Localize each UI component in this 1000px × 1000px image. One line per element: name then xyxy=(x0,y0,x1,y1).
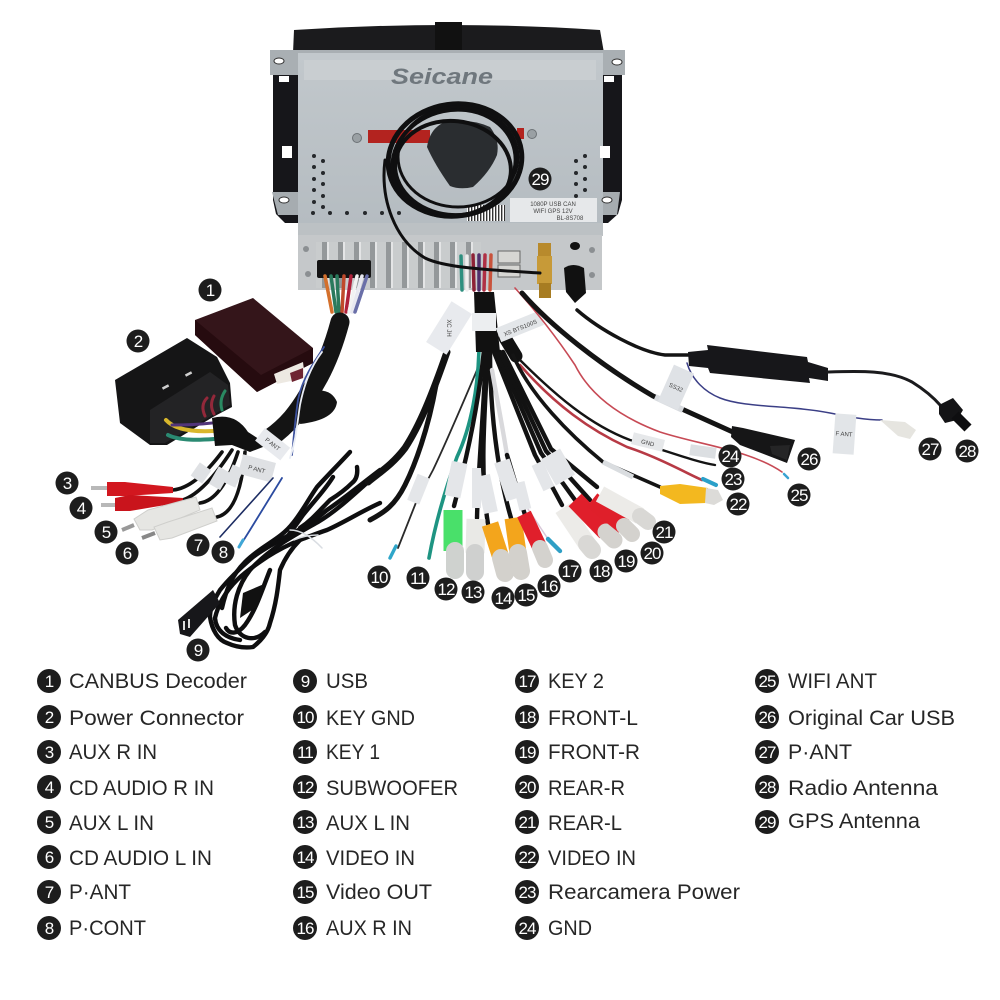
item 22: VIDEO IN xyxy=(548,846,636,870)
badge 8 xyxy=(212,540,234,564)
tag 24 xyxy=(689,444,717,459)
wire 10 xyxy=(398,370,477,548)
badge 10 xyxy=(368,566,390,588)
junction sleeve xyxy=(212,417,268,452)
radio antenna cable xyxy=(828,371,941,406)
cable 17 xyxy=(494,352,562,505)
item 27 xyxy=(755,740,852,764)
mounting ears xyxy=(270,50,625,75)
cable 16 xyxy=(492,370,508,462)
badge 11: 11 xyxy=(410,569,426,588)
wire 22 cable xyxy=(513,355,660,487)
rear screws xyxy=(303,246,595,278)
metal cover plate xyxy=(298,53,603,223)
badge 16: 16 xyxy=(541,577,558,596)
wire 24 xyxy=(520,360,715,465)
badge 28 xyxy=(956,440,978,462)
item 20 xyxy=(515,775,625,800)
left rear connector xyxy=(317,260,371,278)
badge 26: 26 xyxy=(801,450,818,469)
item 1: CANBUS Decoder xyxy=(69,669,247,693)
badge 9 xyxy=(186,638,210,662)
item 11: 11 xyxy=(297,743,313,762)
yellow RCA xyxy=(660,484,723,505)
item 4: CD AUDIO R IN xyxy=(69,776,214,800)
cable 13 xyxy=(477,350,486,518)
GPS puck xyxy=(427,121,498,188)
black rear plug xyxy=(564,265,586,303)
USB plug 26 xyxy=(731,426,795,463)
red sticker right end xyxy=(517,128,524,139)
item 28: Radio Antenna xyxy=(788,776,938,800)
badge 4 xyxy=(70,496,92,520)
cable 19 xyxy=(500,352,590,500)
badge 27: 27 xyxy=(922,440,939,459)
bracket windows xyxy=(279,76,614,158)
item 21: REAR-L xyxy=(548,811,622,835)
black centre sleeve xyxy=(474,292,500,352)
badge 24 xyxy=(718,444,742,468)
badge 29 xyxy=(528,168,552,190)
diagram number badges xyxy=(56,168,978,662)
badge 14: 14 xyxy=(495,589,512,608)
item 18 xyxy=(515,705,638,730)
badge 28: 28 xyxy=(959,442,976,461)
item 23: Rearcamera Power xyxy=(548,880,740,904)
legend column 4 xyxy=(755,669,955,834)
badge 6 xyxy=(116,542,138,564)
item 3: 3 xyxy=(45,743,54,762)
item 11: KEY 1 xyxy=(326,740,380,764)
wire 16 tail xyxy=(507,455,525,515)
badge 2: 2 xyxy=(134,332,143,351)
cable 18 xyxy=(497,352,575,500)
item 11 xyxy=(293,740,380,764)
spec label: 1080P USB CAN xyxy=(530,202,576,208)
badge 7 xyxy=(186,534,210,556)
branch cables xyxy=(173,450,245,517)
vent holes xyxy=(311,154,587,215)
XC cable xyxy=(368,352,447,520)
badge 17 xyxy=(558,560,582,582)
item 9: 9 xyxy=(301,672,310,691)
badge 4: 4 xyxy=(77,499,86,518)
item 14 xyxy=(293,845,415,870)
power connector xyxy=(115,338,232,445)
badge 8: 8 xyxy=(219,543,228,562)
USB plug xyxy=(178,590,220,637)
heat-sink fins xyxy=(316,242,481,288)
badge 2 xyxy=(126,330,150,352)
item 13: 13 xyxy=(297,813,314,832)
coiled cables xyxy=(210,452,380,648)
wire 22 band xyxy=(603,462,633,477)
badge 5: 5 xyxy=(102,523,111,542)
branch cable tags xyxy=(191,462,244,490)
harness wires xyxy=(325,276,367,312)
badge 17: 17 xyxy=(562,562,579,581)
centre cable fan xyxy=(368,292,648,573)
item 25: 25 xyxy=(759,672,776,691)
badge 29: 29 xyxy=(532,170,549,189)
RCA 20 and 21 white xyxy=(600,494,648,522)
item 27: P·ANT xyxy=(788,740,852,764)
blue tip wire xyxy=(522,500,552,545)
badge 13 xyxy=(462,580,484,604)
item 19: 19 xyxy=(519,743,536,762)
item 18: FRONT-L xyxy=(548,706,638,730)
thin red wire 25 xyxy=(515,288,782,472)
badge 21 xyxy=(652,520,676,544)
item 19: FRONT-R xyxy=(548,740,640,764)
item 7: 7 xyxy=(45,883,54,902)
RCA 17 white xyxy=(563,508,592,550)
cable 15 xyxy=(490,350,511,518)
badge 23 xyxy=(722,468,744,490)
RCA 13 white xyxy=(475,519,476,572)
badge 15 xyxy=(514,584,538,606)
badge 12: 12 xyxy=(438,580,455,599)
legend xyxy=(37,669,955,940)
decoder box xyxy=(195,298,313,392)
P-ANT blue wire xyxy=(687,363,882,420)
RCA 14 orange xyxy=(490,524,505,573)
white rear sockets xyxy=(498,251,520,277)
connector slots xyxy=(162,371,192,390)
item 24: 24 xyxy=(519,919,536,938)
head unit top clip xyxy=(435,22,462,54)
right side bracket xyxy=(597,75,622,223)
item 14: VIDEO IN xyxy=(326,846,415,870)
sticker screws xyxy=(352,130,536,142)
badge 13: 13 xyxy=(465,583,482,602)
wire 8 tip xyxy=(239,540,243,547)
badge 6: 6 xyxy=(123,544,132,563)
item 10 xyxy=(293,705,415,730)
badge 14 xyxy=(492,586,514,610)
wire 11 xyxy=(429,350,479,558)
legend column 3 xyxy=(515,669,740,940)
RCA 16 red xyxy=(524,514,545,560)
item 3: AUX R IN xyxy=(69,740,157,764)
badge 22 xyxy=(726,492,750,516)
item 16: 16 xyxy=(297,919,314,938)
RCA 15 orange xyxy=(513,518,521,571)
item 29: GPS Antenna xyxy=(788,809,920,833)
GND tag: GND xyxy=(640,439,655,449)
USB cable bundle xyxy=(178,452,380,648)
RCA plug 5 xyxy=(122,497,200,530)
RCA 18 red xyxy=(575,500,614,540)
item 8: P·CONT xyxy=(69,916,146,940)
RCA 12 green xyxy=(453,510,455,570)
item 13: AUX L IN xyxy=(326,811,410,835)
right cable group xyxy=(513,288,968,505)
XC paper tag xyxy=(426,301,472,355)
ear screw holes xyxy=(274,58,622,203)
item 24: GND xyxy=(548,916,592,940)
badge 20 xyxy=(640,542,664,564)
cables 10 to 16 xyxy=(390,350,597,558)
badge 3: 3 xyxy=(63,474,72,493)
item 20: REAR-R xyxy=(548,776,625,800)
wire 25 tip xyxy=(784,474,788,478)
item 5: AUX L IN xyxy=(69,811,154,835)
item 22: 22 xyxy=(519,848,536,867)
RCA plug 3 xyxy=(91,482,173,496)
barcode tag: XS BTS100S xyxy=(503,319,538,338)
lower cover lip xyxy=(298,223,603,236)
harness sleeve xyxy=(270,322,340,438)
harness paper tag: P ANT xyxy=(263,437,281,453)
wire 10 tip xyxy=(390,546,396,558)
head unit front bezel xyxy=(293,25,604,53)
item 21 xyxy=(515,810,622,835)
item 1: 1 xyxy=(45,672,54,691)
badge 16 xyxy=(538,574,560,598)
badge 26 xyxy=(798,448,820,470)
item 5: 5 xyxy=(45,813,54,832)
item 24 xyxy=(515,916,592,940)
item 10: KEY GND xyxy=(326,706,415,730)
badge 19 xyxy=(614,550,638,572)
item 16: AUX R IN xyxy=(326,916,412,940)
left RCA plugs xyxy=(91,450,282,547)
badge 9: 9 xyxy=(194,641,203,660)
gold antenna connector xyxy=(537,243,552,298)
wire 8 xyxy=(240,478,282,546)
item 7: P·ANT xyxy=(69,880,131,904)
centre rear wires xyxy=(461,255,491,290)
USB paper tag xyxy=(658,365,694,410)
item 6: 6 xyxy=(45,848,54,867)
harness loop xyxy=(300,390,337,424)
item 17 xyxy=(515,669,604,693)
badge 5 xyxy=(94,520,118,544)
item 15: Video OUT xyxy=(326,880,432,904)
spec label: BL-8S708 xyxy=(557,216,584,222)
P-ANT white plug xyxy=(880,420,916,439)
right sleeve xyxy=(505,338,516,356)
P-ANT paper tag: F ANT xyxy=(835,431,853,439)
badge 21: 21 xyxy=(656,523,673,542)
badge 18 xyxy=(590,560,612,582)
item 8 xyxy=(37,916,146,940)
item 9 xyxy=(293,669,368,693)
item 4: 4 xyxy=(45,778,54,797)
spec label xyxy=(510,198,597,222)
GPS cable run xyxy=(384,160,540,273)
legend column 1 xyxy=(37,669,247,940)
red warning sticker xyxy=(368,130,430,143)
item 15: 15 xyxy=(297,883,314,902)
badge 27 xyxy=(918,438,942,460)
barcode tag xyxy=(496,311,544,342)
harness paper tag xyxy=(255,428,290,460)
item 22 xyxy=(515,845,636,870)
cable 14 xyxy=(483,350,488,524)
RCA plug 6 xyxy=(142,508,217,540)
item 16 xyxy=(293,916,412,940)
badge 25: 25 xyxy=(791,486,808,505)
badge 19: 19 xyxy=(618,552,635,571)
item 26: Original Car USB xyxy=(788,706,955,730)
radio antenna connector xyxy=(939,398,968,428)
main harness xyxy=(212,276,367,460)
round socket xyxy=(570,242,580,250)
item 29: 29 xyxy=(759,813,776,832)
badge 18: 18 xyxy=(593,562,610,581)
item 6: CD AUDIO L IN xyxy=(69,846,212,870)
badge 20: 20 xyxy=(644,544,661,563)
badge 3 xyxy=(56,472,78,494)
item 14: 14 xyxy=(297,848,314,867)
item 5 xyxy=(37,810,154,835)
cable 12 xyxy=(454,350,484,506)
item 12: 12 xyxy=(297,778,314,797)
badge 7: 7 xyxy=(194,536,203,555)
badge 12 xyxy=(434,578,458,600)
radio box xyxy=(688,345,828,383)
item 2: Power Connector xyxy=(69,706,244,730)
connector highlight face xyxy=(150,372,230,443)
wire 7 xyxy=(220,478,273,537)
USB paper tag: SS32 xyxy=(668,383,684,394)
connector body xyxy=(115,338,232,445)
GND tag xyxy=(631,432,665,452)
item 23: 23 xyxy=(519,883,536,902)
badge 10: 10 xyxy=(371,568,388,587)
blue and white wires xyxy=(290,347,324,458)
GPS antenna xyxy=(381,95,540,273)
item 20: 20 xyxy=(519,778,536,797)
decoder white plug xyxy=(274,362,305,384)
badge 24: 24 xyxy=(722,447,739,466)
wire 23 xyxy=(520,365,702,480)
cable tie xyxy=(290,530,322,548)
plug strain relief xyxy=(240,584,264,618)
black USB cable xyxy=(522,293,735,433)
centre white band xyxy=(472,313,496,331)
item 17: 17 xyxy=(519,672,536,691)
badge 25 xyxy=(788,484,810,506)
left side bracket xyxy=(273,75,298,223)
item 25: WIFI ANT xyxy=(788,669,877,693)
CANBUS decoder xyxy=(195,298,313,392)
item 28: 28 xyxy=(759,778,776,797)
item 17: KEY 2 xyxy=(548,669,604,693)
barcode sticker xyxy=(467,205,505,221)
P-ANT paper tag xyxy=(833,413,856,455)
XC paper tag: XC JH xyxy=(445,319,451,337)
spec label: WIFI GPS 12V xyxy=(533,209,573,215)
RCA plug 4 xyxy=(101,495,183,511)
RCA 19 red xyxy=(592,500,632,534)
antenna cable from unit xyxy=(577,310,690,355)
badge 23: 23 xyxy=(725,470,742,489)
Seicane logo: Seicane xyxy=(391,64,493,89)
badge 1 xyxy=(198,278,222,302)
item 2: 2 xyxy=(45,708,54,727)
rear panel xyxy=(298,235,602,290)
item 12: SUBWOOFER xyxy=(326,776,458,800)
blue tip xyxy=(548,539,560,551)
badge 11 xyxy=(406,566,430,590)
badge 22: 22 xyxy=(730,495,747,514)
item 9: USB xyxy=(326,669,368,693)
item 13 xyxy=(293,810,410,835)
P-ANT and P-CONT tag xyxy=(238,454,276,482)
item 8: 8 xyxy=(45,919,54,938)
badge 15: 15 xyxy=(518,586,535,605)
item 21: 21 xyxy=(519,813,536,832)
item 27: 27 xyxy=(759,743,776,762)
head unit xyxy=(270,22,625,303)
badge 1: 1 xyxy=(206,281,215,300)
legend column 2 xyxy=(293,669,458,940)
lower mounting ears xyxy=(272,192,620,215)
decoder side shade xyxy=(195,320,313,392)
P-ANT and P-CONT tag: P ANT xyxy=(247,465,266,475)
item 18: 18 xyxy=(519,708,536,727)
item 26: 26 xyxy=(759,708,776,727)
connector coloured wires xyxy=(166,391,225,440)
item 7 xyxy=(37,880,131,904)
USB cable band xyxy=(655,397,683,410)
cable 20 xyxy=(503,352,597,487)
small branch tags xyxy=(407,449,575,514)
item 10: 10 xyxy=(297,708,314,727)
GPS cable coil xyxy=(381,95,529,228)
logo band xyxy=(304,60,596,80)
wire 23 tip xyxy=(703,479,716,485)
